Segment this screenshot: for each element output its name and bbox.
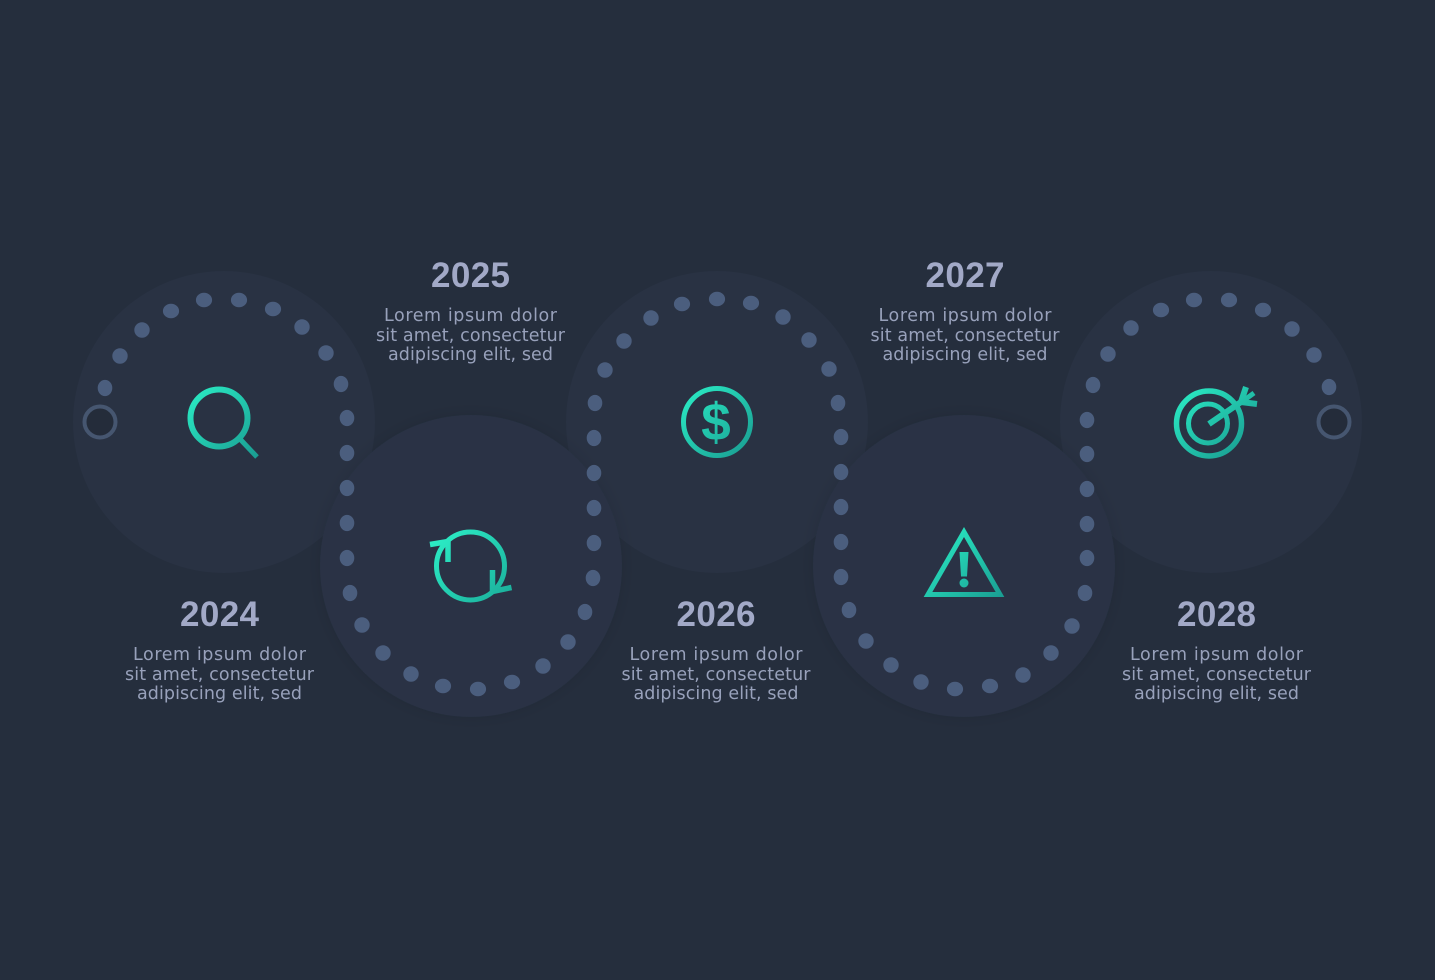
description 2026 <box>622 645 811 704</box>
step: 2027 <box>870 256 1060 594</box>
description 2025: adipiscing elit, sed <box>388 345 553 365</box>
icon: warning triangle <box>928 532 1000 594</box>
year 2028: 2028 <box>1177 595 1256 634</box>
description 2024: adipiscing elit, sed <box>137 684 302 704</box>
description 2028: sit amet, consectetur <box>1122 665 1312 685</box>
description 2024: Lorem ipsum dolor <box>133 645 307 665</box>
icon: refresh arrows <box>430 532 512 600</box>
end ring <box>1318 406 1350 438</box>
description 2024 <box>125 645 315 704</box>
step: 2024 <box>125 390 315 704</box>
description 2028 <box>1122 645 1312 704</box>
icon: target with arrow <box>1176 387 1257 456</box>
icon: dollar coin <box>684 388 750 456</box>
description 2028: Lorem ipsum dolor <box>1130 645 1304 665</box>
description 2027: Lorem ipsum dolor <box>878 306 1052 326</box>
description 2025: sit amet, consectetur <box>376 326 566 346</box>
icon: dollar coin: $ <box>701 393 731 452</box>
start ring <box>84 406 116 438</box>
description 2027: adipiscing elit, sed <box>882 345 1048 365</box>
step: 2026 <box>622 388 811 704</box>
year 2026: 2026 <box>676 595 756 634</box>
step: 2025 <box>376 256 566 600</box>
description 2027: sit amet, consectetur <box>870 326 1060 346</box>
description 2026: adipiscing elit, sed <box>634 684 798 704</box>
description 2028: adipiscing elit, sed <box>1134 684 1299 704</box>
description 2026: sit amet, consectetur <box>622 665 811 685</box>
description 2024: sit amet, consectetur <box>125 665 315 685</box>
dotted timeline path <box>98 292 1336 696</box>
year 2027: 2027 <box>926 256 1004 295</box>
description 2026: Lorem ipsum dolor <box>630 645 803 665</box>
year 2024: 2024 <box>180 595 260 634</box>
background discs <box>73 271 1362 717</box>
year 2025: 2025 <box>431 256 510 295</box>
description 2027 <box>870 306 1060 365</box>
description 2025: Lorem ipsum dolor <box>384 306 558 326</box>
description 2025 <box>376 306 566 365</box>
icon: magnifier <box>190 390 257 457</box>
step: 2028 <box>1122 387 1312 704</box>
